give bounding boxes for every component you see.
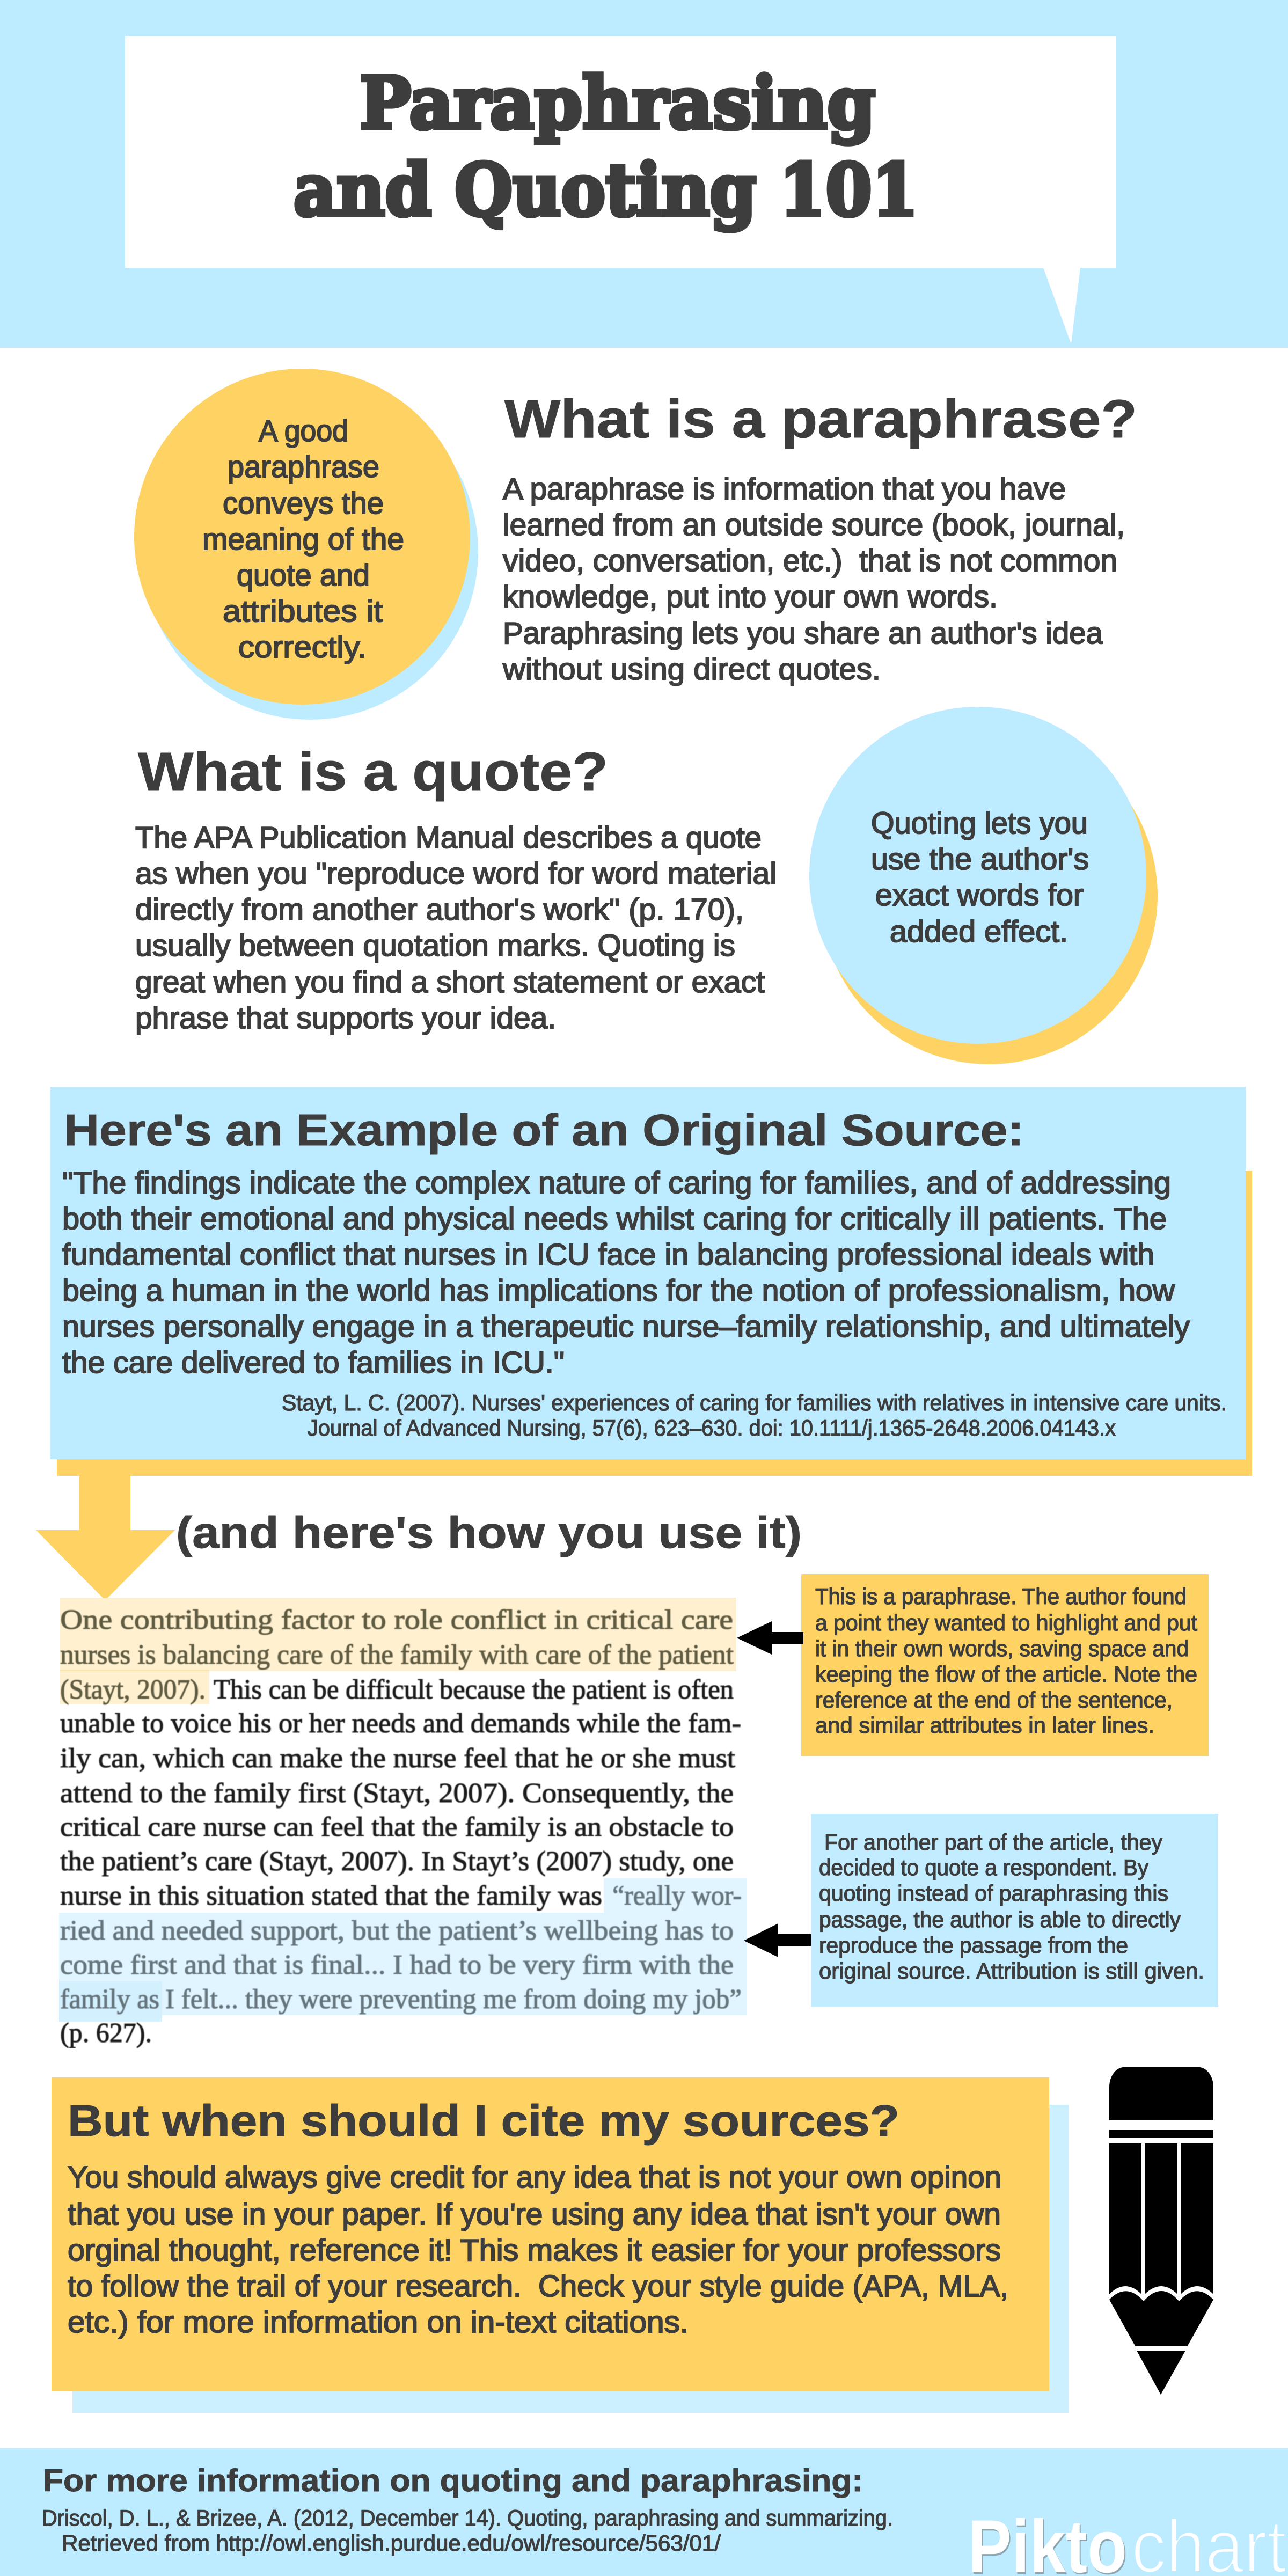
callout circle: good paraphrase: quote and [237,558,370,592]
article excerpt: nurses is balancing care of the family with care of the patient [60,1640,734,1670]
callout: quote note: passage, the author is able to directly [819,1907,1181,1932]
title: and Quoting 101 [294,148,918,232]
callout circle: good paraphrase: A good [259,414,348,448]
text block: paraphrase definition: without using direct quotes. [502,652,881,686]
arrow: to quote [744,1923,811,1957]
text block: citing advice: to follow the trail of your research. Check your style guide (APA, MLA, [68,2269,1008,2303]
source quotation: the care delivered to families in ICU." [62,1345,565,1380]
text block: citing advice: orginal thought, reference it! This makes it easier for your professors [68,2233,1001,2267]
article excerpt: ried and needed support, but the patient’s wellbeing has to [60,1915,734,1946]
article excerpt: (Stayt, 2007). [60,1674,206,1705]
article excerpt: I felt... they were preventing me from doing my job” [165,1984,742,2015]
text block: paraphrase definition: learned from an outside source (book, journal, [503,508,1125,542]
callout circle: good paraphrase [134,369,478,720]
callout circle: good paraphrase: correctly. [238,630,367,664]
heading: how you use it: (and here's how you use it) [176,1507,802,1557]
callout: paraphrase note [801,1574,1209,1756]
callout: paraphrase note: This is a paraphrase. The author found [815,1584,1187,1609]
article excerpt: ily can, which can make the nurse feel that he or she must [60,1743,736,1774]
text block: paraphrase definition: A paraphrase is information that you have [503,472,1066,506]
article excerpt: nurse in this situation stated that the family was [60,1880,602,1911]
callout: quote note: For another part of the article, they [824,1829,1162,1855]
text block: paraphrase definition: Paraphrasing lets you share an author's idea [503,616,1103,650]
callout circle: good paraphrase: meaning of the [202,522,404,557]
speech bubble [125,36,1116,344]
header banner [0,0,1288,348]
article excerpt: attend to the family first (Stayt, 2007). Consequently, the [60,1778,734,1809]
article excerpt: This can be difficult because the patient is often [214,1674,734,1705]
article excerpt: “really wor- [612,1880,742,1911]
text block: paraphrase definition: video, conversation, etc.) that is not common [503,544,1117,578]
callout circle: quoting: added effect. [890,914,1068,949]
source quotation: nurses personally engage in a therapeutic nurse–family relationship, and ultimately [62,1309,1190,1344]
source quotation: fundamental conflict that nurses in ICU face in balancing professional ideals with [62,1238,1154,1272]
callout circle: quoting: exact words for [875,878,1084,912]
footer heading: For more information on quoting and paraphrasing: [43,2463,863,2498]
logo: Piktochart [968,2504,1286,2576]
callout: paraphrase note: it in their own words, saving space and [815,1636,1189,1661]
article excerpt: family as [60,1984,159,2015]
callout: quote note [811,1814,1218,2007]
text block: paraphrase definition [502,472,1125,686]
text block: citing advice: etc.) for more information on in-text citations. [68,2305,689,2339]
article excerpt: come first and that is final... I had to be very firm with the [60,1950,734,1980]
text block: citing advice [68,2160,1008,2339]
article excerpt: unable to voice his or her needs and demands while the fam- [60,1708,741,1739]
callout circle: good paraphrase: attributes it [223,594,383,628]
text block: quote definition: phrase that supports your idea. [135,1001,556,1035]
citation [282,1390,1227,1440]
text block: quote definition: usually between quotation marks. Quoting is [135,928,735,963]
callout circle: quoting: Quoting lets you [871,806,1088,840]
callout: paraphrase note: and similar attributes in later lines. [815,1713,1154,1738]
citation: Journal of Advanced Nursing, 57(6), 623–630. doi: 10.1111/j.1365-2648.2006.04143.x [308,1415,1116,1440]
callout: quote note: decided to quote a respondent. By [819,1855,1148,1880]
footer banner [0,2448,1288,2576]
text block: paraphrase definition: knowledge, put into your own words. [503,580,998,614]
callout: quote note: quoting instead of paraphrasing this [819,1880,1168,1906]
text block: citing advice: You should always give credit for any idea that is not your own opinon [68,2160,1001,2194]
title [294,61,918,232]
callout circle: quoting [809,707,1158,1064]
callout: quote note: original source. Attribution is still given. [819,1958,1204,1984]
title: Paraphrasing [360,61,875,145]
article excerpt: critical care nurse can feel that the family is an obstacle to [60,1812,734,1842]
footer citation: Retrieved from http://owl.english.purdue.edu/owl/resource/563/01/ [62,2530,721,2556]
icon: pencil [1109,2067,1213,2395]
text block: quote definition: directly from another author's work" (p. 170), [135,892,744,927]
heading: what is a paraphrase: What is a paraphrase? [504,389,1137,449]
text block: quote definition: as when you "reproduce word for word material [135,857,777,891]
text block: quote definition: The APA Publication Manual describes a quote [135,821,762,855]
callout circle: good paraphrase: paraphrase [228,450,379,484]
callout circle: good paraphrase: conveys the [223,486,384,521]
footer citation [42,2505,893,2556]
source quotation: both their emotional and physical needs whilst caring for critically ill patients. The [62,1202,1167,1236]
callout: paraphrase note: a point they wanted to highlight and put [815,1610,1197,1635]
text block: quote definition: great when you find a short statement or exact [135,965,765,999]
heading: what is a quote: What is a quote? [138,742,608,802]
article excerpt [59,1598,747,2048]
text block: citing advice: that you use in your paper. If you're using any idea that isn't your own [68,2197,1001,2231]
arrow: to paraphrase [737,1621,803,1655]
text block: quote definition [135,821,777,1035]
heading: when to cite: But when should I cite my sources? [68,2096,899,2146]
callout: paraphrase note: reference at the end of the sentence, [815,1687,1173,1713]
citation: Stayt, L. C. (2007). Nurses' experiences of caring for families with relatives in intensive care units. [282,1390,1227,1415]
callout circle: quoting: use the author's [871,842,1089,876]
source quotation: being a human in the world has implications for the notion of professionalism, how [62,1274,1175,1308]
footer citation: Driscol, D. L., & Brizee, A. (2012, December 14). Quoting, paraphrasing and summarizing. [42,2505,893,2530]
callout: quote note: reproduce the passage from the [819,1933,1128,1958]
panel: original source example [50,1087,1252,1476]
source quotation [62,1166,1190,1380]
panel: when to cite [52,2077,1069,2413]
article excerpt: One contributing factor to role conflict in critical care [60,1605,733,1635]
heading: original source: Here's an Example of an Original Source: [64,1105,1024,1155]
article excerpt: the patient’s care (Stayt, 2007). In Stayt’s (2007) study, one [60,1846,734,1877]
callout: paraphrase note: keeping the flow of the article. Note the [815,1662,1197,1687]
arrow: yellow down [36,1476,175,1600]
article excerpt: (p. 627). [60,2018,152,2048]
source quotation: "The findings indicate the complex nature of caring for families, and of addressing [62,1166,1171,1200]
